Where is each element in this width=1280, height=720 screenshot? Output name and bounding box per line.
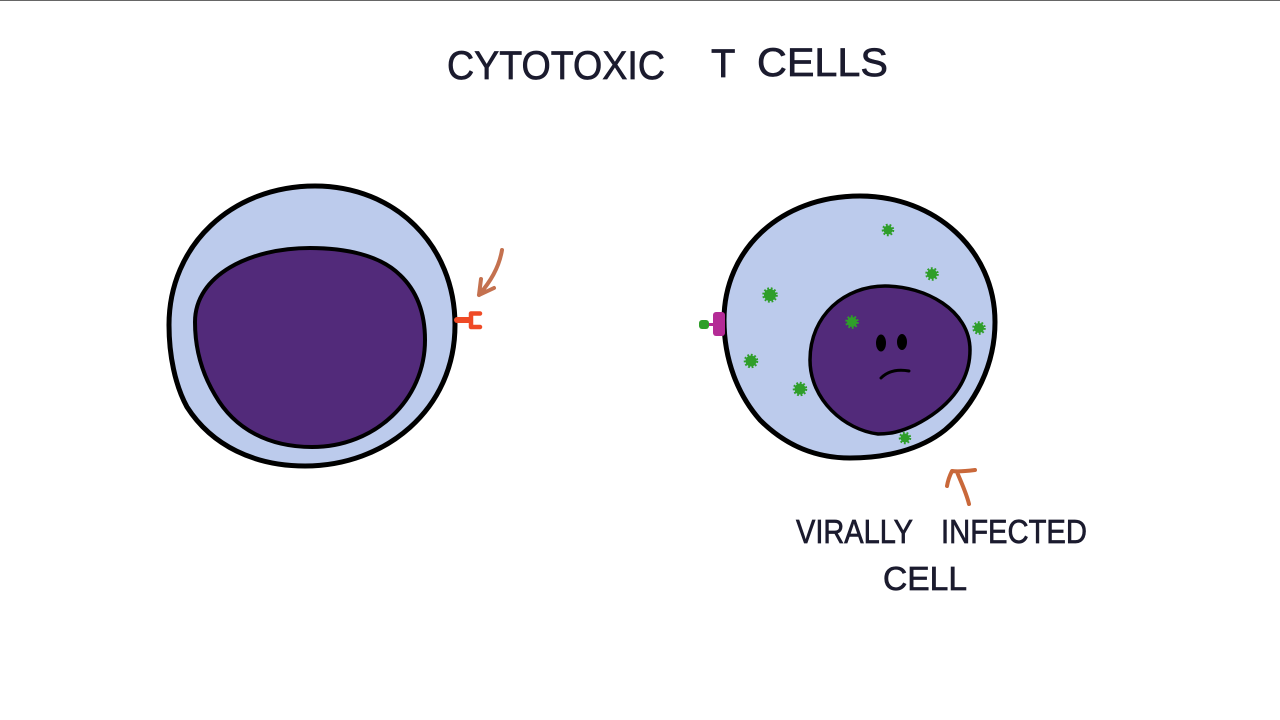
cell body <box>169 186 455 466</box>
nucleus <box>195 248 425 447</box>
cell: cytotoxic T cell <box>169 186 480 466</box>
title: T <box>711 42 735 86</box>
cell body <box>724 196 995 458</box>
title: CELLS <box>757 41 888 85</box>
viruses <box>746 226 984 442</box>
label: virally infected cell: INFECTED <box>941 513 1087 550</box>
cell: virally infected cell <box>699 196 995 458</box>
T cell receptor <box>457 314 480 327</box>
title <box>447 41 888 88</box>
title: CYTOTOXIC <box>447 44 665 88</box>
nucleus <box>810 286 970 434</box>
MHC with viral antigen <box>699 312 725 336</box>
arrow: pointing at receptor <box>479 250 502 295</box>
sad face <box>876 334 909 378</box>
label: virally infected cell: VIRALLY <box>796 513 913 550</box>
arrow: pointing at infected cell <box>947 470 975 504</box>
label: virally infected cell: CELL <box>883 560 967 597</box>
label: virally infected cell <box>796 513 1087 597</box>
